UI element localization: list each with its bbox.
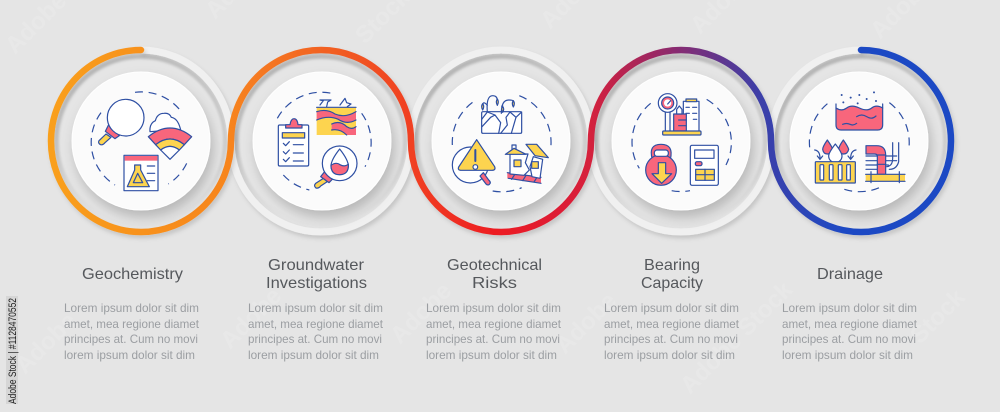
white circle — [253, 72, 391, 210]
icon: groundwater investigations — [277, 92, 371, 190]
title: groundwater investigations — [266, 257, 367, 292]
panel: groundwater investigations — [248, 72, 391, 362]
text: groundwater description: amet, mea regione diamet — [248, 317, 384, 331]
title: bearing capacity — [641, 257, 703, 292]
text: bearing capacity description: lorem ipsum dolor sit dim — [604, 348, 735, 362]
title: geotechnical risks — [447, 257, 542, 292]
white circle — [790, 72, 928, 210]
text: groundwater description: principes at. Cum no movi — [248, 332, 382, 346]
text: bearing capacity description: amet, mea regione diamet — [604, 317, 740, 331]
text: bearing capacity description: Lorem ipsum dolor sit dim — [604, 301, 739, 315]
inner shadow rings — [57, 57, 945, 225]
title: geotechnical risks: Geotechnical — [447, 257, 542, 274]
text: groundwater description: lorem ipsum dolor sit dim — [248, 348, 379, 362]
stock watermarks: Adobe — [385, 277, 457, 349]
text: geotechnical description: Lorem ipsum dolor sit dim — [426, 301, 561, 315]
icon: geochemistry — [91, 92, 192, 191]
title: groundwater investigations: Investigations — [266, 275, 367, 292]
text: geochemistry description — [64, 301, 200, 362]
text: geotechnical description: lorem ipsum dolor sit dim — [426, 348, 557, 362]
gradient progress wave — [51, 50, 951, 232]
text: drainage description: lorem ipsum dolor sit dim — [782, 348, 913, 362]
text: bearing capacity description — [604, 301, 740, 362]
title: geotechnical risks: Risks — [472, 275, 517, 292]
icon: drainage — [809, 91, 909, 192]
pale unfilled ring track — [141, 50, 861, 232]
panel: drainage — [782, 72, 928, 362]
title: groundwater investigations: Groundwater — [268, 257, 365, 274]
side stock id label: Adobe Stock | #1128470552 — [7, 298, 19, 404]
stock watermarks: Adobe — [215, 282, 287, 354]
text: geochemistry description: principes at. Cum no movi — [64, 332, 198, 346]
text: groundwater description: Lorem ipsum dolor sit dim — [248, 301, 383, 315]
text: geochemistry description: amet, mea regione diamet — [64, 317, 200, 331]
text: drainage description: Lorem ipsum dolor sit dim — [782, 301, 917, 315]
text: geochemistry description: Lorem ipsum dolor sit dim — [64, 301, 199, 315]
icon: bearing capacity — [632, 94, 731, 192]
white circle — [72, 72, 210, 210]
text: geotechnical description — [426, 301, 562, 362]
stock watermarks: Adobe — [10, 307, 82, 379]
title: bearing capacity: Capacity — [641, 275, 703, 292]
panel: geotechnical risks — [426, 72, 570, 362]
text: bearing capacity description: principes at. Cum no movi — [604, 332, 738, 346]
stock watermarks: Stock — [905, 283, 971, 349]
icon: geotechnical risks — [452, 96, 551, 192]
panel: geochemistry — [64, 72, 210, 362]
text: groundwater description — [248, 301, 384, 362]
text: drainage description — [782, 301, 918, 362]
text: drainage description: principes at. Cum no movi — [782, 332, 916, 346]
text: geochemistry description: lorem ipsum dolor sit dim — [64, 348, 195, 362]
title: geochemistry: Geochemistry — [82, 266, 183, 283]
stock watermarks: Adobe — [550, 287, 622, 359]
white circle — [612, 72, 750, 210]
text: geotechnical description: amet, mea regione diamet — [426, 317, 562, 331]
stock watermarks: Adobe Stock — [675, 276, 798, 399]
title: drainage: Drainage — [817, 266, 883, 283]
text: geotechnical description: principes at. Cum no movi — [426, 332, 560, 346]
title: bearing capacity: Bearing — [644, 257, 700, 274]
panel: bearing capacity — [604, 72, 750, 362]
text: drainage description: amet, mea regione diamet — [782, 317, 918, 331]
white circle — [432, 72, 570, 210]
